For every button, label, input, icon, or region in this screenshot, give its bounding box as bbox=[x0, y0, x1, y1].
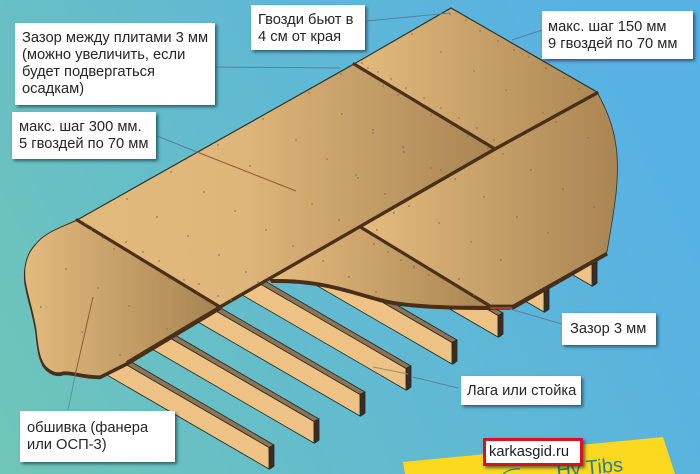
label: gap between sheets: Зазор между плитами 3 мм bbox=[22, 30, 208, 46]
label: step 300 mm: 5 гвоздей по 70 мм bbox=[19, 136, 148, 152]
label: nail edge distance: 4 см от края bbox=[258, 29, 341, 45]
yellow sticky note bbox=[403, 437, 675, 474]
sheet: centre bbox=[77, 64, 495, 307]
label: site name: karkasgid.ru bbox=[489, 444, 569, 460]
sheet: lower left, cut by a curve bbox=[25, 220, 220, 378]
sheet: lower middle, cut by a curve bbox=[268, 222, 490, 309]
label: sheathing material: обшивка (фанера bbox=[27, 420, 148, 436]
label: gap 3 mm bbox=[562, 313, 656, 345]
sheet: top right bbox=[354, 8, 597, 149]
gaps between sheets bbox=[77, 64, 597, 362]
label: sheathing material: или ОСП-3) bbox=[27, 437, 107, 453]
leader: sheathing bbox=[68, 297, 93, 410]
label: step 150 mm bbox=[542, 11, 693, 59]
label: gap 3 mm: Зазор 3 мм bbox=[570, 321, 646, 337]
label: sheathing material bbox=[20, 411, 175, 462]
label: step 300 mm: макс. шаг 300 мм. bbox=[19, 119, 142, 135]
label: gap between sheets: осадкам) bbox=[22, 81, 84, 97]
joists bbox=[99, 163, 597, 469]
label: joist or stud bbox=[461, 376, 581, 405]
nails bbox=[40, 14, 595, 355]
leader: nails distance bbox=[367, 13, 450, 21]
leader: step 150 mm bbox=[512, 30, 542, 40]
label: nail edge distance bbox=[251, 5, 365, 50]
label: step 150 mm: 9 гвоздей по 70 мм bbox=[548, 36, 678, 52]
label: gap between sheets bbox=[15, 23, 215, 105]
label: step 300 mm bbox=[12, 112, 156, 159]
label: nail edge distance: Гвозди бьют в bbox=[258, 12, 353, 28]
label: step 150 mm: макс. шаг 150 мм bbox=[548, 19, 667, 35]
leader: joist bbox=[373, 367, 458, 388]
sheet: right, cut by a curve bbox=[362, 92, 617, 309]
leader: gap between sheets bbox=[215, 67, 340, 68]
label: gap between sheets: (можно увеличить, если bbox=[22, 47, 185, 63]
leader: step 300 mm bbox=[157, 136, 296, 191]
leader: gap 3 mm bbox=[510, 309, 562, 324]
label: joist or stud: Лага или стойка bbox=[467, 383, 576, 399]
label: gap between sheets: будет подвергаться bbox=[22, 64, 155, 80]
label: site name bbox=[483, 438, 583, 466]
